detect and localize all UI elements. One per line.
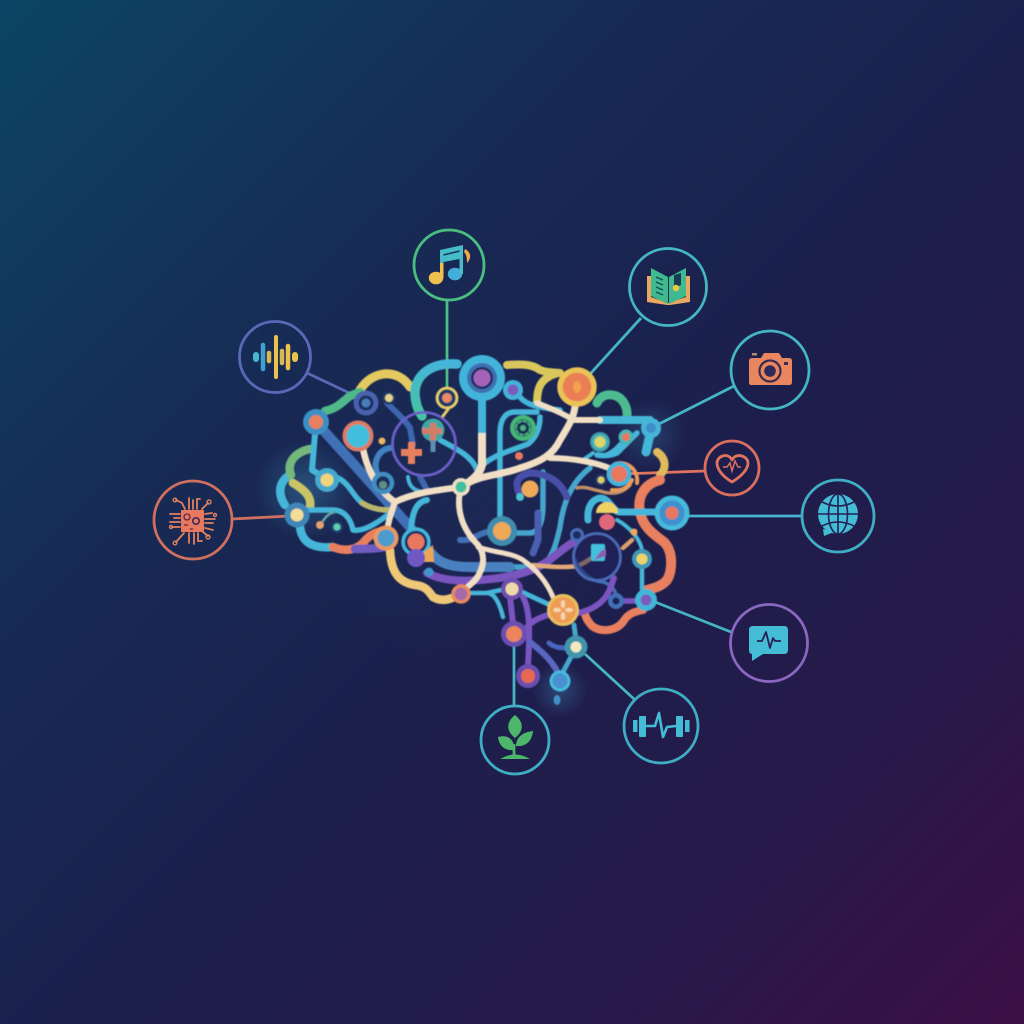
icon: open book (630, 248, 706, 326)
inner tubes (303, 397, 657, 673)
icon: chat bubble pulse (730, 604, 808, 682)
brain network (280, 355, 687, 705)
icon: music notes (414, 230, 484, 300)
icon: dumbbell pulse (624, 689, 698, 763)
icon: heart pulse (705, 441, 759, 495)
outer brain outline (280, 364, 671, 630)
left lobe nodes (284, 390, 469, 602)
cream tree branches (362, 403, 617, 597)
brain glow (255, 310, 686, 718)
icon: sprout (481, 706, 549, 774)
icon: circuit chip (154, 481, 232, 559)
icon: camera (731, 331, 809, 409)
lavender circle with plus icons (392, 412, 456, 476)
central and right nodes (437, 355, 687, 611)
icon: globe with speech tail (802, 480, 874, 552)
connector lines (232, 300, 802, 706)
icon: sound wave (240, 322, 310, 392)
brain stem nodes (501, 578, 588, 705)
